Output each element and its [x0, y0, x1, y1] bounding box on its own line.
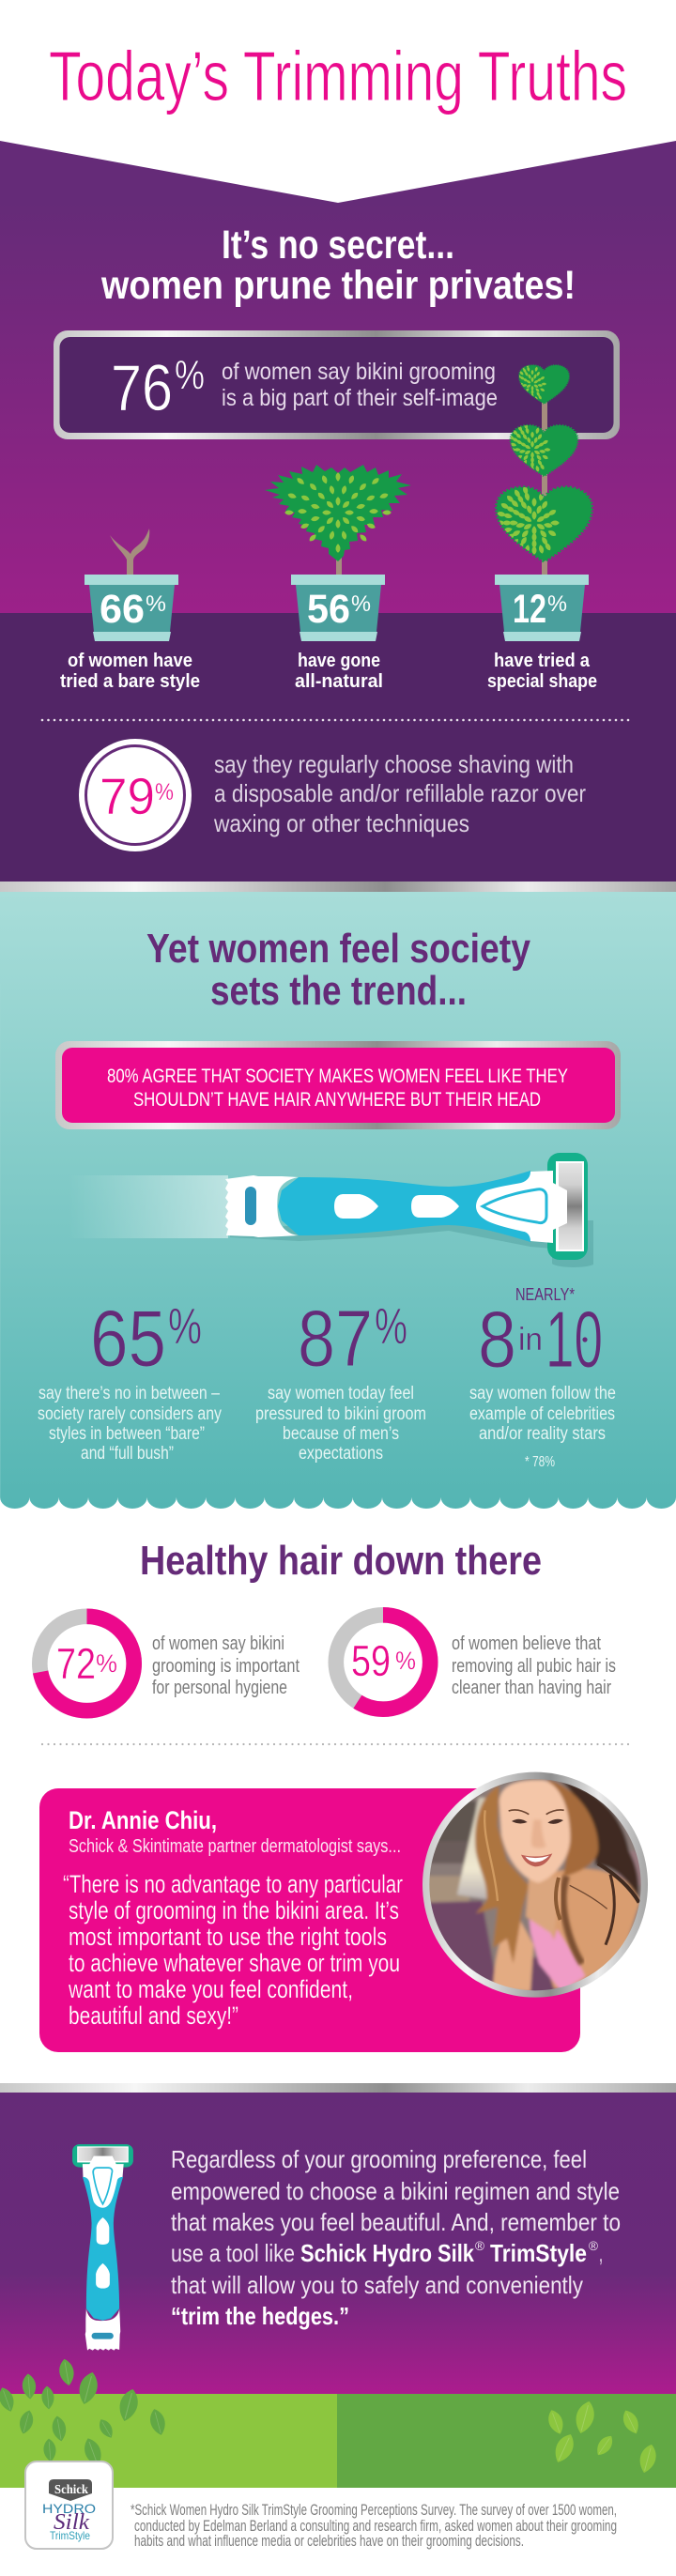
stat: 87%: %: [375, 1298, 407, 1355]
icon: natural bushy plant: [265, 465, 411, 641]
text: razor preference: a disposable and/or refillable razor over: [214, 779, 586, 807]
icon: heart topiary plant: 12: [513, 587, 546, 632]
label: special shape: have tried a: [494, 651, 591, 671]
label: bare style: [60, 651, 200, 692]
speaker role: Schick & Skintimate partner dermatologist says...: [69, 1836, 401, 1857]
quote text: [63, 1870, 403, 2030]
stat: nearly 8 in 10: * 78%: [525, 1454, 555, 1470]
callout: 76% self-image: is a big part of their self-image: [222, 385, 498, 411]
heading: no secret: women prune their privates!: [100, 263, 576, 308]
photo: Dr. Annie Chiu portrait: [422, 1770, 648, 1998]
donut chart: 72%: %: [96, 1649, 117, 1678]
green band left: [0, 2394, 337, 2488]
text: closing message: that makes you feel beautiful. And, remember to: [171, 2208, 621, 2236]
leaves: right cluster: [545, 2400, 659, 2475]
text: cleaner: cleaner than having hair: [452, 1678, 611, 1698]
stat: 87%: [255, 1295, 426, 1464]
text: closing message: ,: [599, 2239, 603, 2267]
text: cleaner: of women believe that: [452, 1633, 601, 1654]
text: hygiene: of women say bikini: [152, 1633, 284, 1654]
text: razor preference: waxing or other techniques: [213, 809, 469, 837]
leaves: left cluster: [0, 2358, 168, 2468]
text: closing message: ®: [475, 2238, 485, 2253]
heading: society sets the trend: [146, 926, 530, 1014]
text: razor preference: [213, 750, 586, 837]
icon: natural bushy plant: 56: [307, 587, 350, 632]
stat: nearly 8 in 10: in: [518, 1322, 543, 1357]
text: closing message: that will allow you to safely and conveniently: [171, 2271, 583, 2299]
text: cleaner: removing all pubic hair is: [452, 1656, 616, 1677]
heading: no secret: [100, 222, 576, 308]
stat: nearly 8 in 10: example of celebrities: [469, 1404, 615, 1424]
donut chart: 59%: 59: [351, 1636, 391, 1685]
icon: bare twig plant: 66: [100, 587, 145, 632]
label: special shape: [487, 651, 597, 692]
logo: Schick Hydro Silk TrimStyle: HYDRO: [42, 2501, 96, 2516]
text: closing message: Regardless of your grooming preference, feel: [171, 2145, 587, 2173]
icon: heart topiary plant: %: [547, 591, 567, 617]
stat: 87%: say women today feel: [268, 1384, 414, 1403]
text: closing message: [171, 2145, 621, 2330]
quote text: to achieve whatever shave or trim you: [69, 1949, 400, 1977]
text: closing message: “trim the hedges.”: [171, 2302, 349, 2330]
donut chart: 72%: 72: [56, 1639, 96, 1688]
callout: 80% agree: 80% AGREE THAT SOCIETY MAKES WOMEN FEEL LIKE THEY: [107, 1066, 568, 1087]
quote text: style of grooming in the bikini area. It’s: [69, 1896, 399, 1924]
label: special shape: special shape: [487, 671, 597, 692]
heading: healthy hair: Healthy hair down there: [140, 1538, 542, 1584]
stat: 87%: 87: [298, 1295, 373, 1384]
stat: 87%: pressured to bikini groom: [255, 1404, 426, 1424]
stat: 65%: 65: [90, 1295, 166, 1384]
quote text: most important to use the right tools: [69, 1923, 387, 1951]
quote text: beautiful and sexy!”: [69, 2001, 238, 2030]
stat: nearly 8 in 10: and/or reality stars: [479, 1424, 606, 1444]
icon: bare twig plant: %: [146, 591, 166, 617]
heading: no secret: It’s no secret...: [222, 222, 454, 268]
stat: nearly 8 in 10: 10: [545, 1296, 603, 1385]
donut chart: 59%: [336, 1615, 430, 1710]
stat: 65%: %: [168, 1298, 202, 1355]
dark purple lower band: [0, 613, 676, 882]
stat: 87%: expectations: [299, 1444, 383, 1464]
badge: 79% circle: %: [155, 779, 174, 805]
green band right: [337, 2394, 676, 2488]
stat: nearly 8 in 10: say women follow the: [469, 1384, 616, 1403]
footnote: [131, 2501, 617, 2550]
text: closing message: TrimStyle: [490, 2239, 587, 2267]
callout: 80% agree: [55, 1041, 621, 1129]
stat: nearly 8 in 10: NEARLY*: [515, 1285, 575, 1304]
label: all-natural: [295, 651, 383, 692]
stat: nearly 8 in 10: [469, 1285, 616, 1470]
panel: teal society section: [0, 892, 676, 1509]
label: all-natural: have gone: [298, 651, 380, 671]
callout: 76% self-image: of women say bikini grooming: [222, 359, 496, 385]
text: closing message: use a tool like: [171, 2239, 295, 2267]
panel: dermatologist quote: [39, 1788, 580, 2052]
text: closing message: Schick Hydro Silk: [300, 2239, 474, 2267]
text: cleaner: [452, 1633, 616, 1698]
teal scalloped background: [0, 892, 676, 1509]
badge: 79% circle: 79: [100, 767, 155, 825]
icon: vertical razor: [72, 2144, 133, 2351]
label: bare style: tried a bare style: [60, 671, 200, 692]
donut chart: 72%: [39, 1617, 134, 1710]
logo: Schick Hydro Silk TrimStyle: Schick: [54, 2483, 88, 2497]
stat: 65%: styles in between “bare”: [49, 1424, 205, 1444]
text: hygiene: grooming is important: [152, 1656, 300, 1677]
heading: society sets the trend: Yet women feel society: [146, 926, 530, 972]
stat: 65%: say there’s no in between –: [38, 1384, 220, 1403]
purple chevron background: [0, 141, 676, 613]
quote text: want to make you feel confident,: [68, 1975, 353, 2003]
stat: 65%: society rarely considers any: [38, 1404, 222, 1424]
text: razor preference: say they regularly choose shaving with: [214, 750, 574, 778]
logo: Schick Hydro Silk TrimStyle: Silk: [54, 2510, 89, 2535]
icon: horizontal razor with motion trail: [69, 1153, 593, 1267]
badge: 79% circle: [79, 739, 192, 851]
speaker name: Dr. Annie Chiu,: [69, 1806, 217, 1834]
donut chart: 59%: %: [395, 1647, 416, 1675]
callout: 76% self-image: %: [175, 352, 205, 398]
callout: 80% agree: SHOULDN’T HAVE HAIR ANYWHERE BUT THEIR HEAD: [133, 1089, 541, 1111]
callout: 76% self-image: 76: [111, 351, 173, 424]
callout: 76% self-image: [54, 330, 620, 439]
label: all-natural: all-natural: [295, 671, 383, 692]
text: closing message: ®: [589, 2238, 599, 2253]
label: bare style: of women have: [68, 651, 192, 671]
stat: 87%: because of men’s: [283, 1424, 399, 1444]
panel: healthy hair section: [39, 1538, 648, 2052]
stat: 65%: and “full bush”: [81, 1444, 174, 1464]
heading: society sets the trend: sets the trend...: [210, 968, 467, 1014]
icon: natural bushy plant: %: [351, 591, 371, 617]
quote text: “There is no advantage to any particular: [63, 1870, 403, 1898]
text: hygiene: for personal hygiene: [152, 1678, 287, 1698]
icon: heart topiary plant: [495, 363, 592, 641]
stat: nearly 8 in 10: 8: [478, 1296, 516, 1385]
stat: 65%: [38, 1295, 222, 1464]
logo: Schick Hydro Silk TrimStyle: [25, 2461, 113, 2549]
panel: purple intro section: [0, 141, 676, 882]
logo: Schick Hydro Silk TrimStyle: TrimStyle: [50, 2529, 90, 2542]
panel: closing purple section: [0, 2093, 676, 2488]
icon: bare twig plant: [84, 529, 178, 641]
text: hygiene: [152, 1633, 300, 1698]
